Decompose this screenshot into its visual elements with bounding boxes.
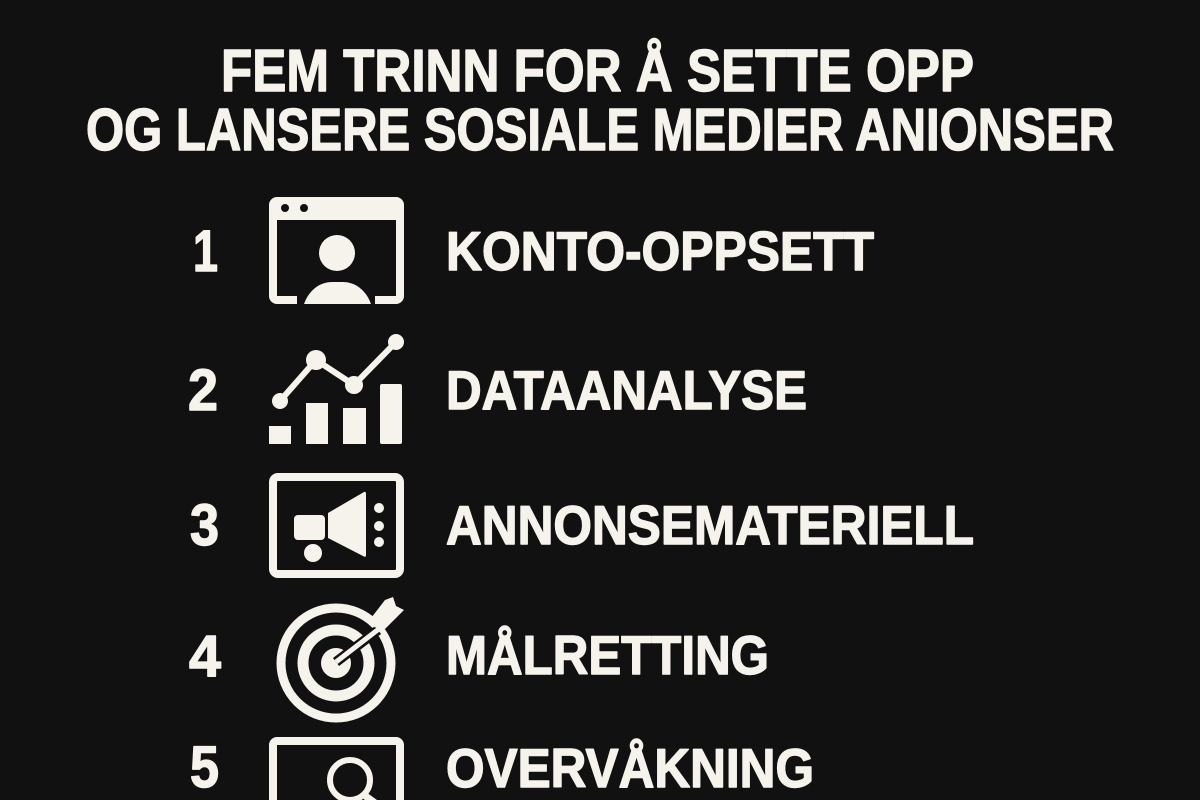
icon: magnifier in frame [273,741,400,800]
label: konto-oppsett: KONTO-OPPSETT [446,220,874,282]
step number 3: 3 [190,493,219,558]
icon: browser window with user [272,200,402,304]
title: FEM TRINN FOR Å SETTE OPP [221,38,974,104]
icon: target with arrow [281,597,404,718]
step 3: annonsemateriell [190,477,974,574]
label: annonsemateriell: ANNONSEMATERIELL [446,494,974,556]
title [86,38,1114,163]
label: dataanalyse: DATAANALYSE [446,359,807,421]
step 5: overvåkning [190,735,814,800]
step number 5: 5 [190,735,219,800]
icon: line and bar chart [269,334,404,444]
step number 1: 1 [193,219,218,284]
label: målretting: MÅLRETTING [446,624,769,686]
step number 4: 4 [189,624,221,689]
step number 2: 2 [188,358,218,423]
step 4: målretting [189,597,769,718]
step 2: dataanalyse [188,334,807,444]
label: overvåkning: OVERVÅKNING [446,737,814,799]
step 1: konto-oppsett [193,200,874,304]
icon: megaphone in frame [273,477,400,574]
